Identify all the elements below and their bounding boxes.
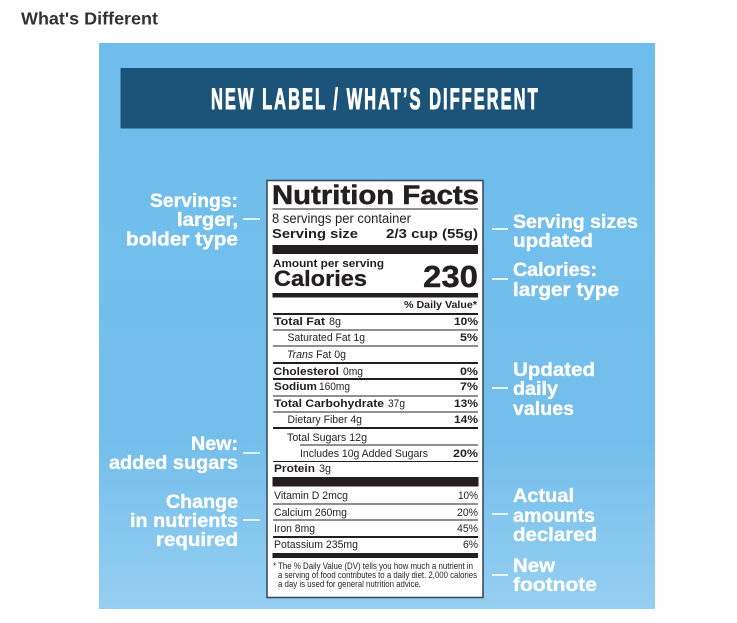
macronutrient rows: Total Fat xyxy=(274,316,325,328)
daily value header: % Daily Value* xyxy=(404,300,477,311)
callout: calories xyxy=(492,259,619,301)
label footnote xyxy=(273,561,478,589)
macronutrient rows: Includes 10g Added Sugars xyxy=(300,448,428,460)
callout: daily values: daily xyxy=(513,378,558,400)
macronutrient rows: 3g xyxy=(319,463,331,475)
vitamins and minerals rows: 6% xyxy=(463,539,478,551)
callout: serving sizes: updated xyxy=(513,230,593,252)
label title: Nutrition Facts xyxy=(272,180,479,210)
callout: actual amounts: amounts xyxy=(513,505,595,527)
callout: serving sizes: Serving sizes xyxy=(513,211,638,233)
macronutrient rows: Total Carbohydrate xyxy=(274,398,384,410)
macronutrient rows: Sodium xyxy=(274,381,317,393)
banner: NEW LABEL / WHAT’S DIFFERENT xyxy=(211,83,538,116)
macronutrient rows: 20% xyxy=(453,448,478,460)
callout: actual amounts xyxy=(492,485,597,546)
callout: change in nutrients: required xyxy=(156,529,238,551)
macronutrient rows: Total Sugars 12g xyxy=(287,432,367,444)
callout: daily values: values xyxy=(513,398,574,420)
callout: servings xyxy=(126,190,260,250)
callout: actual amounts: Actual xyxy=(513,485,574,507)
callout: added sugars: added sugars xyxy=(109,452,238,474)
servings xyxy=(272,211,478,241)
callout: serving sizes xyxy=(492,211,638,252)
vitamins and minerals rows: 10% xyxy=(458,490,478,502)
callout: servings: Servings: xyxy=(150,190,238,212)
callout: actual amounts: declared xyxy=(513,524,597,546)
label footnote: a serving of food contributes to a daily diet. 2,000 calories xyxy=(278,570,478,580)
macronutrient rows: 7% xyxy=(460,381,478,393)
vitamins and minerals rows xyxy=(273,490,478,551)
callout: footnote: New xyxy=(513,555,556,577)
calories xyxy=(273,258,478,294)
macronutrient rows: 0% xyxy=(460,366,478,378)
vitamins and minerals rows: Potassium 235mg xyxy=(274,539,358,551)
page heading: What's Different xyxy=(21,8,158,28)
callout: footnote: footnote xyxy=(513,574,597,596)
macronutrient rows: 160mg xyxy=(319,381,350,393)
macronutrient rows: Protein xyxy=(274,463,315,475)
macronutrient rows: 0mg xyxy=(343,366,363,378)
label footnote: a day is used for general nutrition advice. xyxy=(278,579,421,589)
callout: daily values xyxy=(492,359,595,420)
banner xyxy=(120,68,632,128)
macronutrient rows: 5% xyxy=(460,332,478,344)
callout: change in nutrients: Change xyxy=(166,491,238,513)
macronutrient rows: 10% xyxy=(454,316,478,328)
callout: servings: bolder type xyxy=(126,228,238,250)
callout: added sugars xyxy=(109,433,260,474)
vitamins and minerals rows: 20% xyxy=(457,507,478,519)
vitamins and minerals rows: Iron 8mg xyxy=(274,523,315,535)
label footnote: * The % Daily Value (DV) tells you how much a nutrient in xyxy=(273,561,473,571)
callout: calories: Calories: xyxy=(513,259,597,281)
callout: change in nutrients xyxy=(130,491,260,551)
vitamins and minerals rows: Vitamin D 2mcg xyxy=(274,490,348,502)
macronutrient rows: 8g xyxy=(329,316,341,328)
macronutrient rows: Dietary Fiber 4g xyxy=(288,414,362,426)
macronutrient rows: 14% xyxy=(454,414,478,426)
macronutrient rows xyxy=(273,316,478,475)
callout: calories: larger type xyxy=(513,279,619,301)
macronutrient rows: Saturated Fat 1g xyxy=(288,332,365,344)
calories: Amount per serving xyxy=(273,258,384,270)
servings: Serving size xyxy=(272,226,358,241)
nutrition facts label xyxy=(267,180,483,598)
macronutrient rows: Trans Fat 0g xyxy=(287,349,346,361)
macronutrient rows: Cholesterol xyxy=(274,366,339,378)
servings: 8 servings per container xyxy=(272,211,411,226)
panel: blue background xyxy=(99,43,655,609)
calories: 230 xyxy=(423,259,478,294)
servings: 2/3 cup (55g) xyxy=(386,226,478,241)
macronutrient rows: 37g xyxy=(388,398,405,410)
callout: footnote xyxy=(492,555,597,596)
callout: servings: larger, xyxy=(177,209,238,231)
callout: added sugars: New: xyxy=(191,433,238,455)
vitamins and minerals rows: Calcium 260mg xyxy=(274,507,347,519)
callout: daily values: Updated xyxy=(513,359,595,381)
macronutrient rows: 13% xyxy=(454,398,478,410)
calories: Calories xyxy=(274,266,367,291)
callout: change in nutrients: in nutrients xyxy=(130,510,238,532)
vitamins and minerals rows: 45% xyxy=(457,523,478,535)
